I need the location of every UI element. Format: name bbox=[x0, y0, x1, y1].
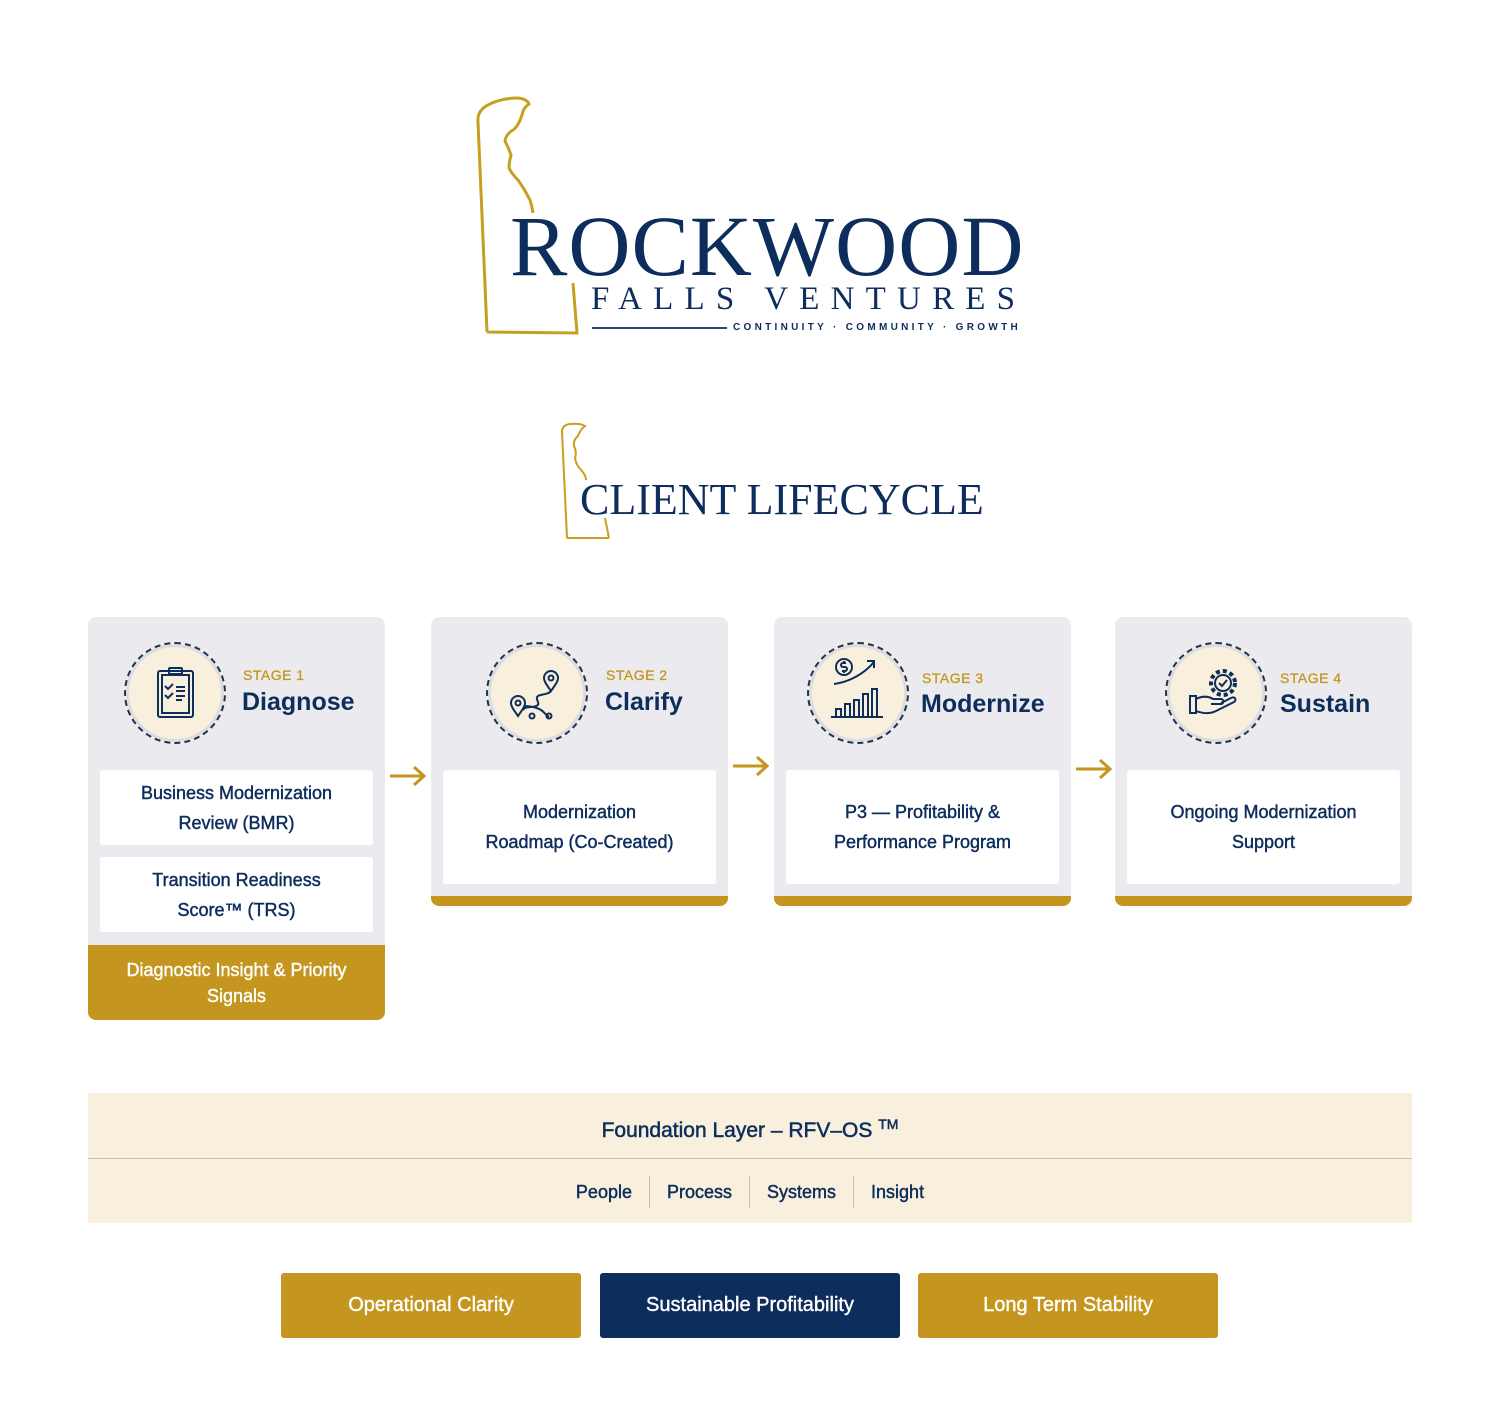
button: long term stability bbox=[918, 1273, 1218, 1338]
panel: stage 4 sustain bbox=[1115, 617, 1412, 906]
logo subtitle: FALLS VENTURES bbox=[591, 281, 1026, 317]
text block: roadmap: Modernization bbox=[523, 802, 636, 822]
callout: diagnostic insight: Signals bbox=[207, 986, 266, 1006]
panel: stage 2 clarify: STAGE 2 bbox=[606, 667, 668, 683]
text block: roadmap: Roadmap (Co-Created) bbox=[485, 832, 674, 852]
text block: ongoing support: Support bbox=[1232, 832, 1295, 852]
arrow 1 bbox=[390, 766, 426, 786]
panel: stage 1 diagnose bbox=[88, 617, 385, 1020]
callout: diagnostic insight: Diagnostic Insight & Priority bbox=[126, 960, 347, 980]
title: client lifecycle bbox=[561, 422, 984, 539]
logo bbox=[476, 96, 1026, 334]
icon: growth chart bbox=[807, 642, 909, 744]
arrow 3 bbox=[1076, 758, 1112, 779]
title: client lifecycle: CLIENT LIFECYCLE bbox=[580, 475, 984, 524]
logo icon: delaware outline bbox=[476, 96, 579, 334]
text block: P3 bbox=[786, 770, 1059, 884]
text block: TRS bbox=[100, 857, 373, 932]
pillars: Process bbox=[667, 1182, 732, 1202]
pillars: Insight bbox=[871, 1182, 924, 1202]
text block: P3: Performance Program bbox=[834, 832, 1011, 852]
panel: stage 1 diagnose: Diagnose bbox=[242, 688, 355, 716]
panel: foundation layer bbox=[88, 1093, 1412, 1223]
text block: P3: P3 — Profitability & bbox=[845, 802, 1000, 822]
icon: clipboard bbox=[124, 642, 226, 744]
text block: ongoing support: Ongoing Modernization bbox=[1170, 802, 1357, 822]
text block: TRS: Transition Readiness bbox=[152, 870, 321, 890]
panel: stage 3 modernize: STAGE 3 bbox=[922, 670, 984, 686]
text block: BMR bbox=[100, 770, 373, 845]
pillars: People bbox=[576, 1182, 632, 1202]
button: long term stability: Long Term Stability bbox=[983, 1294, 1153, 1316]
pillars: Systems bbox=[767, 1182, 836, 1202]
icon: map route bbox=[486, 642, 588, 744]
text block: BMR: Business Modernization bbox=[141, 782, 332, 802]
text block: roadmap bbox=[443, 770, 716, 884]
button: operational clarity bbox=[281, 1273, 581, 1338]
panel: stage 1 diagnose: STAGE 1 bbox=[243, 667, 305, 683]
pillars bbox=[576, 1176, 924, 1208]
button: sustainable profitability: Sustainable Profitability bbox=[646, 1294, 854, 1316]
text block: ongoing support bbox=[1127, 770, 1400, 884]
logo wordmark: ROCKWOOD bbox=[510, 198, 1024, 294]
tagline: CONTINUITY · COMMUNITY · GROWTH bbox=[733, 322, 1021, 333]
panel: stage 4 sustain: STAGE 4 bbox=[1280, 670, 1342, 686]
panel: stage 3 modernize: Modernize bbox=[921, 690, 1045, 718]
panel: stage 2 clarify: Clarify bbox=[605, 688, 683, 716]
text block: TRS: Score™ (TRS) bbox=[177, 900, 296, 920]
title icon: delaware outline bbox=[561, 422, 610, 539]
icon: hand with gear bbox=[1165, 642, 1267, 744]
panel: stage 4 sustain: Sustain bbox=[1280, 690, 1370, 718]
panel: stage 2 clarify bbox=[431, 617, 728, 906]
heading: foundation layer: Foundation Layer – RFV–OS TM bbox=[602, 1116, 898, 1142]
button: operational clarity: Operational Clarity bbox=[348, 1294, 514, 1316]
button: sustainable profitability bbox=[600, 1273, 900, 1338]
text block: BMR: Review (BMR) bbox=[178, 812, 294, 832]
panel: stage 3 modernize bbox=[774, 617, 1071, 906]
arrow 2 bbox=[733, 756, 770, 776]
callout: diagnostic insight bbox=[88, 945, 385, 1020]
